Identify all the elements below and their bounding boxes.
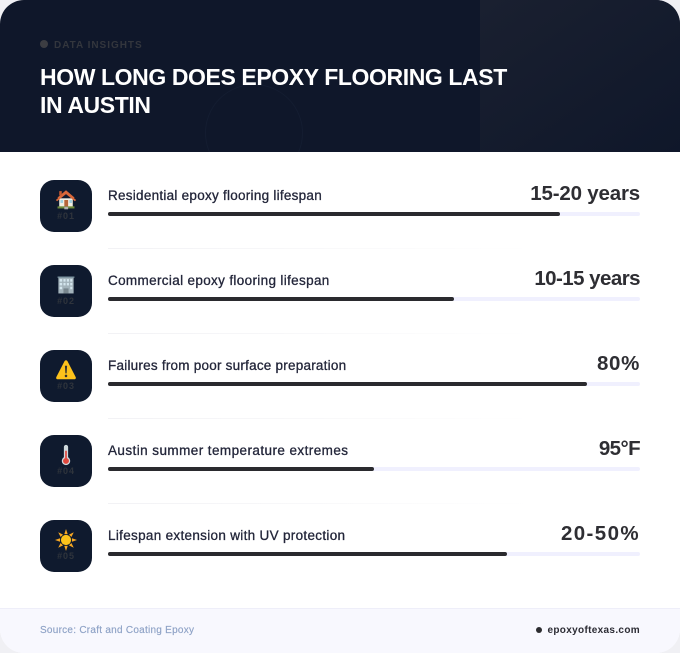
title xyxy=(40,64,508,118)
eyebrow label: DATA INSIGHTS xyxy=(54,40,143,51)
progress bar: 50% xyxy=(108,467,640,471)
value: 15-20 years xyxy=(530,182,640,205)
header panel xyxy=(0,0,680,152)
row 3: surface preparation failures xyxy=(40,350,640,402)
row 4: summer temperature xyxy=(40,435,640,487)
source: Source: Craft and Coating Epoxy xyxy=(40,625,194,636)
label: Failures from poor surface preparation xyxy=(108,358,346,373)
row 2: commercial lifespan xyxy=(40,265,640,317)
value: 95°F xyxy=(599,437,640,460)
title: HOW LONG DOES EPOXY FLOORING LAST xyxy=(40,64,507,90)
icon: house xyxy=(40,180,92,232)
value: 10-15 years xyxy=(534,267,640,290)
value: 80% xyxy=(597,352,640,375)
icon: thermometer xyxy=(40,435,92,487)
progress bar: 90% xyxy=(108,382,640,386)
icon: sun: #05 xyxy=(57,551,75,561)
icon: sun xyxy=(40,520,92,572)
icon: office building xyxy=(40,265,92,317)
icon: office building: #02 xyxy=(57,296,75,306)
label: Lifespan extension with UV protection xyxy=(108,528,345,543)
title: IN AUSTIN xyxy=(40,92,151,118)
website: epoxyoftexas.com xyxy=(547,625,640,636)
progress bar: 75% xyxy=(108,552,640,556)
icon: warning: #03 xyxy=(57,381,75,391)
progress bar: 85% xyxy=(108,212,640,216)
row 1: residential lifespan xyxy=(40,180,640,232)
icon: thermometer: #04 xyxy=(57,466,75,476)
label: Residential epoxy flooring lifespan xyxy=(108,188,322,203)
icon: warning xyxy=(40,350,92,402)
label: Austin summer temperature extremes xyxy=(108,443,348,458)
row 5: UV protection xyxy=(40,520,640,572)
progress bar: 65% xyxy=(108,297,640,301)
value: 20-50% xyxy=(561,522,640,545)
label: Commercial epoxy flooring lifespan xyxy=(108,273,330,288)
icon: house: #01 xyxy=(57,211,75,221)
footer xyxy=(0,608,680,653)
